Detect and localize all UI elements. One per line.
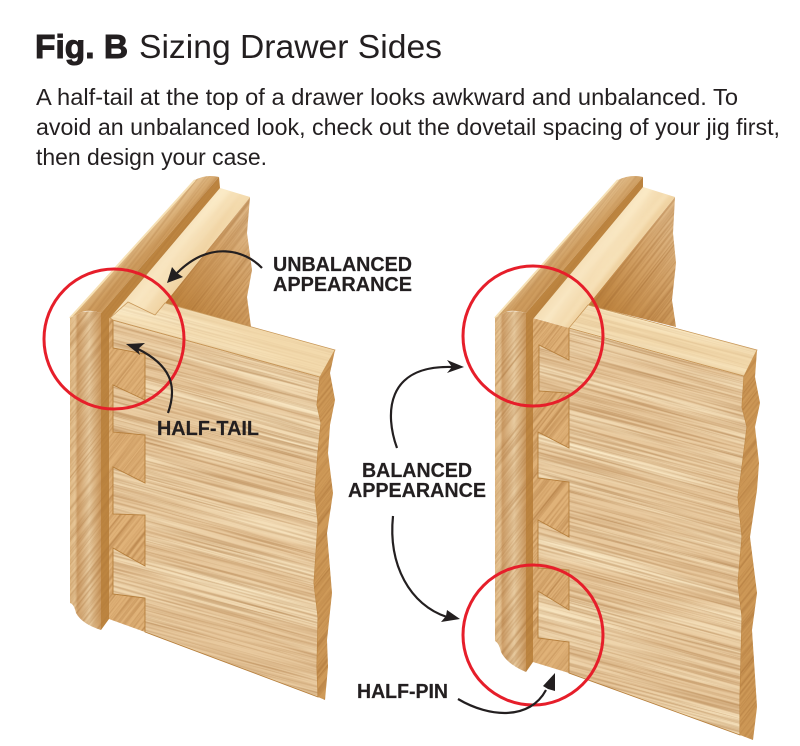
red circle: top of right drawer — [463, 266, 603, 406]
label: half-pin: HALF-PIN — [357, 681, 448, 703]
red circle: bottom of right drawer — [463, 565, 603, 705]
right drawer: balanced dovetail joint — [495, 176, 760, 740]
label: unbalanced appearance — [273, 254, 412, 296]
intro text: avoid an unbalanced look, check out the dovetail spacing of your jig first, — [36, 114, 780, 140]
label: unbalanced appearance: APPEARANCE — [273, 274, 412, 296]
intro text — [36, 84, 780, 170]
arrow: half-tail — [126, 343, 172, 413]
title: Fig. B — [35, 28, 128, 65]
label: balanced appearance — [348, 460, 486, 502]
label: balanced appearance: BALANCED — [362, 460, 472, 482]
arrow: balanced appearance to top circle — [391, 360, 464, 448]
title: Sizing Drawer Sides — [139, 28, 442, 65]
label: unbalanced appearance: UNBALANCED — [273, 254, 412, 276]
label: half-tail: HALF-TAIL — [157, 418, 259, 440]
label: balanced appearance: APPEARANCE — [348, 480, 486, 502]
arrow: unbalanced appearance — [167, 251, 262, 283]
intro text: A half-tail at the top of a drawer looks awkward and unbalanced. To — [36, 84, 738, 110]
intro text: then design your case. — [36, 144, 267, 170]
arrow: half-pin — [458, 673, 555, 713]
red circle: half-tail at top of left drawer — [44, 269, 184, 409]
arrow: balanced appearance to bottom circle — [392, 516, 460, 622]
left drawer: unbalanced dovetail joint — [70, 176, 335, 700]
